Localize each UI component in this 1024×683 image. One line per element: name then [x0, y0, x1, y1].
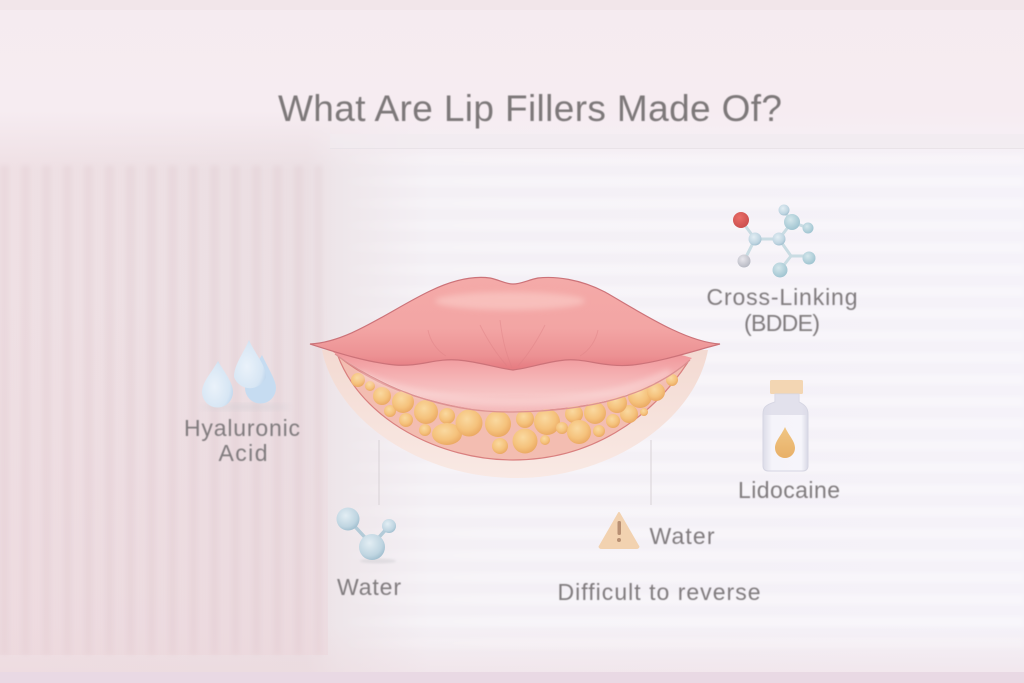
icon: water drops [200, 340, 290, 410]
label: Water (warning): Water [650, 523, 715, 549]
icon: warning triangle [600, 513, 638, 548]
label: Difficult to reverse: Difficult to reverse [558, 579, 760, 605]
label: Lidocaine: Lidocaine [738, 477, 840, 503]
upper lip [310, 277, 720, 370]
lower lip [333, 344, 692, 411]
title: What Are Lip Fillers Made Of? [278, 88, 782, 129]
label: Hyaluronic Acid: Acid [218, 440, 268, 466]
label: Cross-Linking (BDDE): Cross-Linking [706, 284, 858, 310]
icon: cross-linking molecule [733, 204, 816, 278]
label: Water: Water [337, 574, 401, 600]
leader lines [379, 440, 651, 505]
label: Cross-Linking (BDDE) [706, 284, 858, 336]
label: Hyaluronic Acid: Hyaluronic [184, 415, 300, 441]
icon: water molecule [336, 508, 396, 564]
label: Hyaluronic Acid [184, 415, 300, 466]
skin halo [322, 350, 708, 478]
icon: lidocaine vial [763, 380, 808, 471]
filler pocket [338, 356, 688, 460]
label: Cross-Linking (BDDE): (BDDE) [744, 310, 820, 336]
lips illustration [310, 277, 720, 505]
filler bubbles [351, 373, 678, 454]
